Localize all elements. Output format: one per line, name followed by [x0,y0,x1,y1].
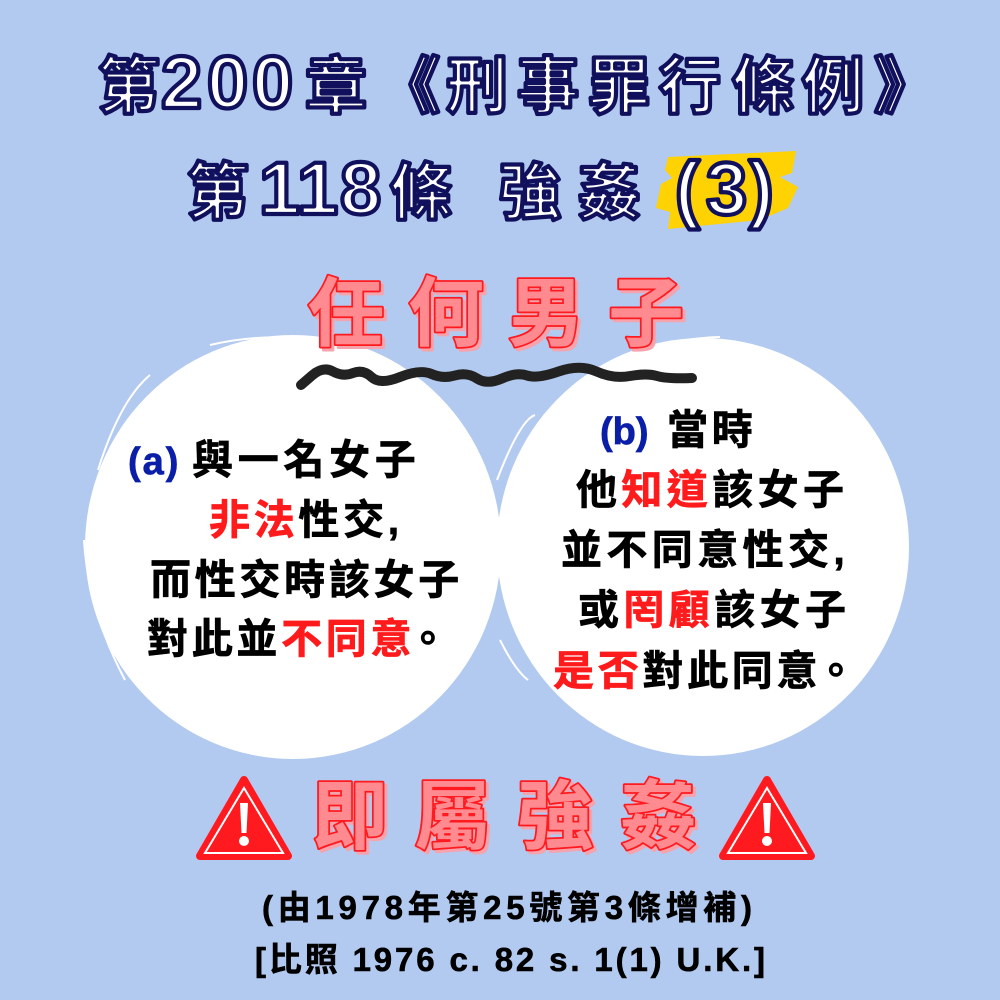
heading: any male: 任何男子 [308,272,684,357]
text block: clause b: 他知道該女子 [576,467,848,513]
heading: constitutes rape: 即屬強姦 [312,775,696,860]
title: chapter name: 0 [207,41,248,124]
title: section name: 3 [706,147,747,230]
title: section name: ( [675,147,700,230]
text block: clause b [553,407,860,694]
text block: clause a: 非法性交, [209,497,403,543]
title: section name: 條 [390,159,452,228]
title: section name: 強 [499,159,561,228]
title: chapter name: 章 [305,53,367,122]
title: section name: 1 [259,147,300,230]
highlight: yellow brush behind (3) [656,151,798,229]
text block: clause b: (b) [600,411,649,453]
squiggle underline [301,368,692,385]
title: chapter name: 2 [161,41,202,124]
text block: clause b: 或罔顧該女子 [578,587,850,633]
title: chapter name: 例 [802,53,864,122]
title: chapter name: 第 [98,53,160,122]
text block: clause a: 對此並不同意。 [147,616,452,662]
title: section name: 姦 [578,159,640,228]
text block: clause b: 是否對此同意。 [553,648,860,694]
text block: clause b: 並不同意性交, [561,527,849,573]
text block: clause a: 與一名女子 [192,437,420,483]
title: section name: 1 [297,147,338,230]
title: chapter name: 條 [732,53,794,122]
title: section name: 第 [187,159,249,228]
title: chapter name: 《 [378,53,440,122]
footnote: comparison reference: [比照 1976 c. 82 s. 1(1) U.K.] [255,941,765,978]
title: chapter name: 0 [252,41,293,124]
title: chapter name: 刑 [446,53,508,122]
title: section name: 8 [340,147,381,230]
text block: clause a [128,437,463,662]
text block: clause a: 而性交時該女子 [150,557,463,603]
icon: right warning triangle [723,780,811,856]
title: chapter name: 行 [659,53,721,122]
title: section name: ) [749,147,774,230]
title: chapter name: 罪 [588,53,650,122]
circle: right panel [497,337,909,756]
footnote: amendment note: (由1978年第25號第3條增補) [262,889,752,926]
circle: left panel [84,335,501,759]
title: chapter name: 》 [874,53,936,122]
text block: clause a: (a) [128,441,180,483]
icon: left warning triangle [200,780,288,856]
title: chapter name: 事 [517,53,579,122]
text block: clause b: 當時 [667,407,756,453]
